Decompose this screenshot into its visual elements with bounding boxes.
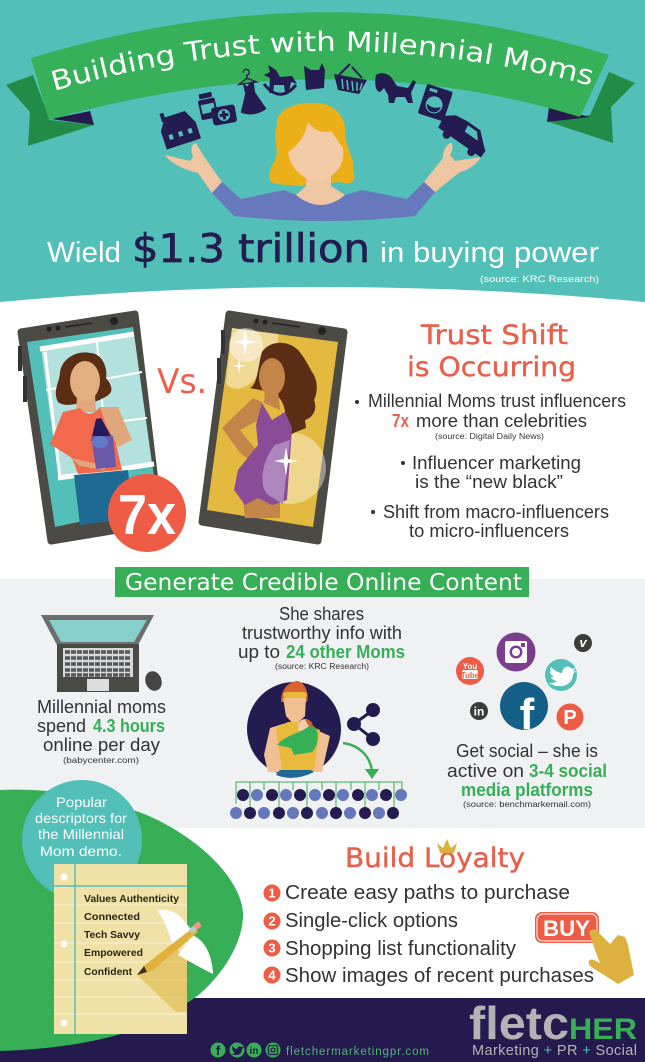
- item 1: Create easy paths to purchase: [285, 882, 570, 904]
- icon: dress on hanger: [235, 67, 267, 116]
- item 4: 4: [268, 968, 276, 982]
- buying power headline: Wield: [47, 237, 121, 269]
- social platforms stat: media platforms: [461, 780, 593, 800]
- bullets: Millennial Moms trust influencers: [368, 391, 626, 411]
- shares info stat: She shares: [279, 604, 364, 624]
- arms: [165, 143, 222, 193]
- buying power headline: $1.3 trillion: [132, 227, 370, 272]
- 7x badge: [108, 474, 186, 552]
- shares info stat: up to: [238, 642, 280, 662]
- item 3: Shopping list functionality: [285, 938, 516, 960]
- social platforms stat: (source: benchmarkemail.com): [463, 800, 591, 809]
- notebook page: [54, 864, 187, 1034]
- icon: twitter: [545, 659, 577, 691]
- fletcher logo: Marketing + PR + Social: [472, 1043, 637, 1059]
- icon: washing machine: [418, 84, 453, 122]
- descriptor list: Connected: [84, 912, 140, 923]
- social platforms stat: active on: [447, 761, 524, 781]
- trust shift copy: Trust Shift: [420, 320, 568, 351]
- pencil shadow: [137, 948, 187, 1012]
- item 3: 3: [268, 940, 276, 956]
- shares info stat: (source: KRC Research): [275, 662, 369, 671]
- household icons arc: [156, 63, 493, 162]
- social media icon cluster: [456, 632, 592, 739]
- woman juggling household icons: [165, 103, 481, 221]
- icon: pinterest: P: [563, 707, 577, 729]
- buying power headline: (source: KRC Research): [480, 274, 599, 285]
- 7x badge: 7x: [118, 483, 176, 547]
- popular descriptors callout: Mom demo.: [40, 843, 122, 859]
- icon: linkedin: in: [474, 704, 484, 718]
- section heading bar: Generate Credible Online Content: [125, 570, 522, 596]
- social platforms stat: [447, 741, 607, 809]
- social platforms stat: Get social – she is: [456, 741, 598, 761]
- shares info stat: trustworthy info with: [242, 623, 402, 643]
- footer band: [0, 998, 645, 1062]
- mother with baby illustration: [247, 681, 341, 778]
- trust shift copy: [355, 320, 626, 541]
- window: [40, 334, 154, 480]
- icon: shirt: [304, 63, 325, 90]
- network of 24 moms: [230, 782, 407, 819]
- camera and speaker: [46, 317, 118, 332]
- online hours stat: (babycenter.com): [63, 756, 139, 765]
- buying power headline: [47, 227, 599, 285]
- vs label: Vs.: [157, 362, 207, 402]
- icon: share: [347, 703, 380, 746]
- neck and chest: [296, 172, 345, 205]
- arrow to moms network: [343, 743, 379, 779]
- white trust shift section background: [0, 287, 645, 580]
- icon: youtube: Tube: [461, 671, 480, 680]
- item 2: Single-click options: [285, 910, 458, 932]
- icon: vimeo: v: [579, 635, 587, 650]
- item 4: Show images of recent purchases: [285, 965, 594, 987]
- social platforms stat: 3-4 social: [529, 761, 607, 781]
- descriptor list: [84, 894, 179, 978]
- sparkles: [232, 328, 298, 476]
- influencer woman: [50, 352, 132, 525]
- shares info stat: 24 other Moms: [286, 642, 405, 662]
- online hours stat: spend: [37, 716, 86, 736]
- icon: linkedin: in: [250, 1046, 258, 1057]
- sweater: [212, 182, 435, 221]
- descriptor list: Values Authenticity: [84, 894, 179, 905]
- item 1: 1: [268, 886, 276, 900]
- fletcher logo: fletc: [469, 997, 569, 1049]
- icon: car: [434, 109, 493, 162]
- fletcher logo: HER: [569, 1013, 637, 1046]
- title banner: [6, 12, 635, 146]
- celebrity woman: [222, 343, 317, 518]
- icon: dog: [375, 73, 416, 103]
- bullets: Influencer marketing: [412, 453, 581, 473]
- buy button: BUY: [543, 916, 590, 941]
- fletcher logo: [469, 997, 637, 1059]
- build loyalty heading: Build Loyalty: [345, 843, 525, 874]
- popular descriptors callout: Popular: [56, 794, 107, 810]
- icon: house: [156, 104, 201, 149]
- build loyalty white background: [0, 828, 645, 999]
- icon: youtube: You: [463, 662, 477, 671]
- bullets: Shift from macro-influencers: [383, 502, 609, 522]
- icon: rocking horse: [264, 65, 297, 94]
- bullets: [355, 391, 626, 541]
- gray credible content section background: [0, 579, 645, 828]
- icon: crown: [437, 839, 457, 853]
- title text: Building Trust with Millennial Moms: [52, 30, 592, 90]
- online hours stat: Millennial moms: [37, 697, 166, 717]
- green blob: [0, 790, 243, 1051]
- online hours stat: online per day: [43, 735, 160, 755]
- buy button: [535, 912, 599, 943]
- camera and speaker: [254, 318, 326, 335]
- spotlight glows: [226, 328, 326, 504]
- icon: medicine bottle and first aid kit: [196, 91, 237, 126]
- winged pencil: [137, 909, 213, 975]
- popular descriptors callout: descriptors for: [35, 810, 127, 826]
- bullets: more than celebrities: [416, 411, 587, 431]
- online hours stat: [37, 697, 166, 765]
- icon: youtube: [456, 657, 484, 685]
- phone: influencer: [18, 314, 160, 541]
- icon: shopping basket: [334, 64, 367, 94]
- bullets: is the “new black”: [415, 472, 563, 492]
- icon: twitter: [230, 1042, 244, 1058]
- bullets: (source: Digital Daily News): [435, 432, 544, 441]
- bullets: 7x: [392, 411, 409, 431]
- descriptor list: Empowered: [84, 948, 143, 959]
- icon: pointing hand: [589, 929, 634, 984]
- icon: instagram: [266, 1042, 280, 1058]
- shares info stat: [238, 604, 405, 671]
- icon: laptop and mouse: [41, 615, 164, 693]
- icon: facebook: f: [520, 690, 535, 739]
- popular descriptors callout: the Millennial: [38, 826, 124, 842]
- footer social icons: [210, 1042, 280, 1058]
- item 2: 2: [268, 914, 276, 928]
- icon: facebook: f: [216, 1043, 221, 1058]
- website url: fletchermarketingpr.com: [286, 1046, 429, 1058]
- icon: instagram: [496, 632, 536, 672]
- descriptor list: Tech Savvy: [84, 930, 140, 941]
- loyalty list: [264, 882, 594, 987]
- trust shift copy: is Occurring: [407, 352, 576, 383]
- popular descriptors callout: [22, 780, 142, 900]
- bullets: to micro-influencers: [409, 521, 569, 541]
- header teal background: [0, 0, 645, 310]
- hair: [269, 103, 354, 186]
- descriptor list: Confident: [84, 967, 133, 978]
- online hours stat: 4.3 hours: [93, 716, 165, 736]
- phone: celebrity: [202, 314, 344, 541]
- buying power headline: in buying power: [380, 237, 599, 269]
- face: [288, 122, 343, 182]
